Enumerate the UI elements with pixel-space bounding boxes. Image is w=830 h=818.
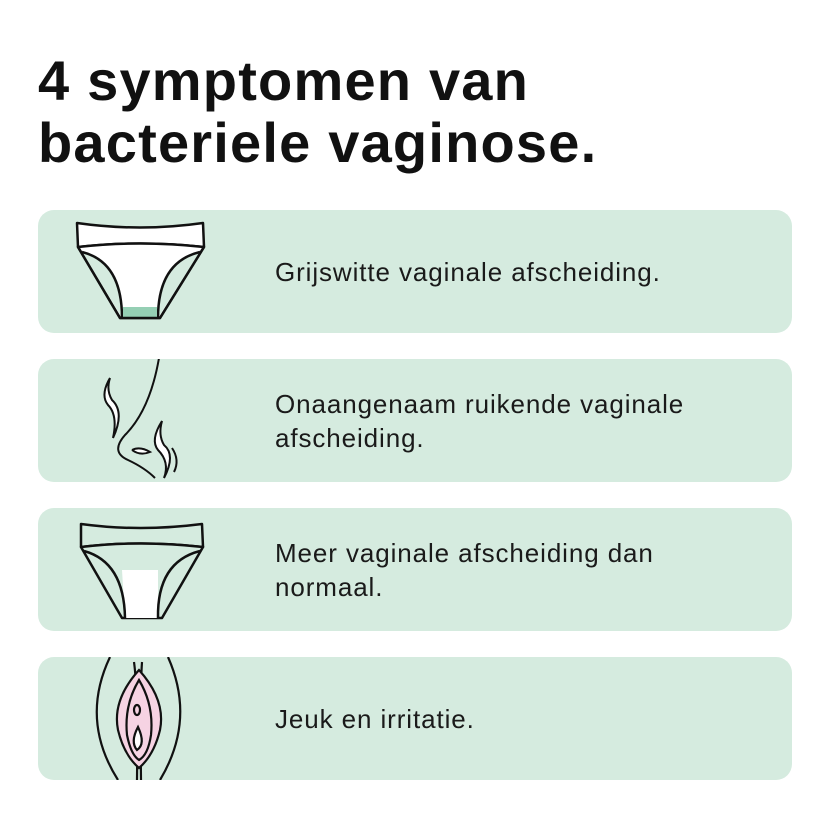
panel: smell <box>38 359 792 482</box>
title: 4 symptomen van <box>38 49 529 112</box>
title <box>38 49 597 174</box>
icon: underwear green <box>76 222 206 320</box>
panel: itching <box>38 657 792 780</box>
panel: discharge <box>38 210 792 333</box>
title: bacteriele vaginose. <box>38 111 597 174</box>
text: normaal. <box>275 572 383 602</box>
text: Grijswitte vaginale afscheiding. <box>275 256 661 286</box>
text: Onaangenaam ruikende vaginale <box>275 388 684 418</box>
text: Meer vaginale afscheiding dan <box>275 538 654 568</box>
text: Jeuk en irritatie. <box>275 704 475 734</box>
text: afscheiding. <box>275 422 425 452</box>
icon: nose with smell <box>103 359 178 479</box>
text <box>275 388 684 452</box>
text <box>275 538 654 602</box>
panel: more discharge <box>38 508 792 631</box>
icon: underwear white <box>80 522 204 620</box>
icon: vulva <box>96 657 182 780</box>
